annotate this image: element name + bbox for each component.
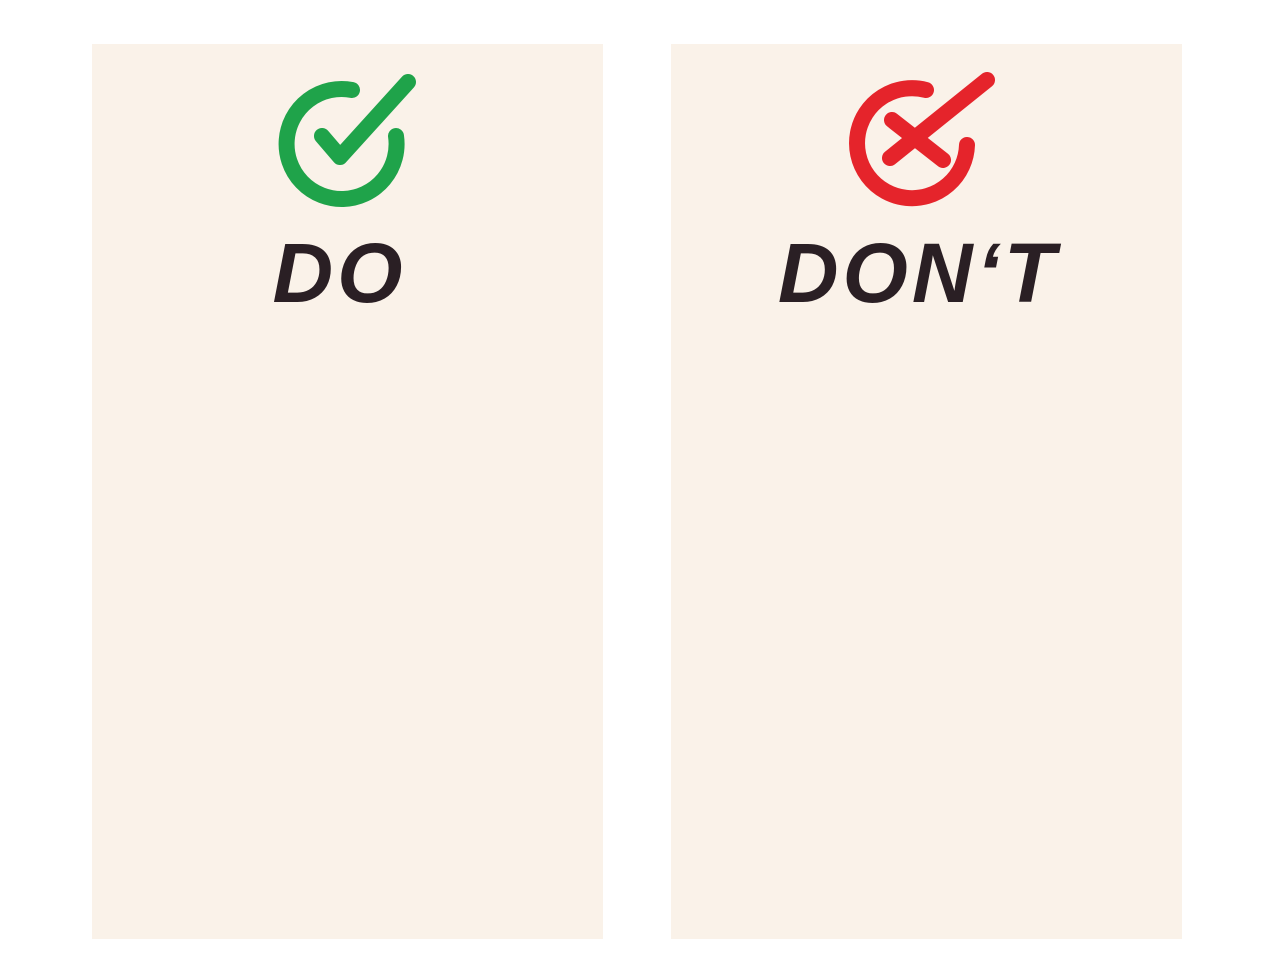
heading: DO: DO [272,226,406,320]
icon: red cross [849,72,995,206]
panel: don't [671,44,1182,939]
panel: do [92,44,603,939]
heading: DON'T: DON‘T [778,226,1059,320]
icon: green check [278,74,416,207]
